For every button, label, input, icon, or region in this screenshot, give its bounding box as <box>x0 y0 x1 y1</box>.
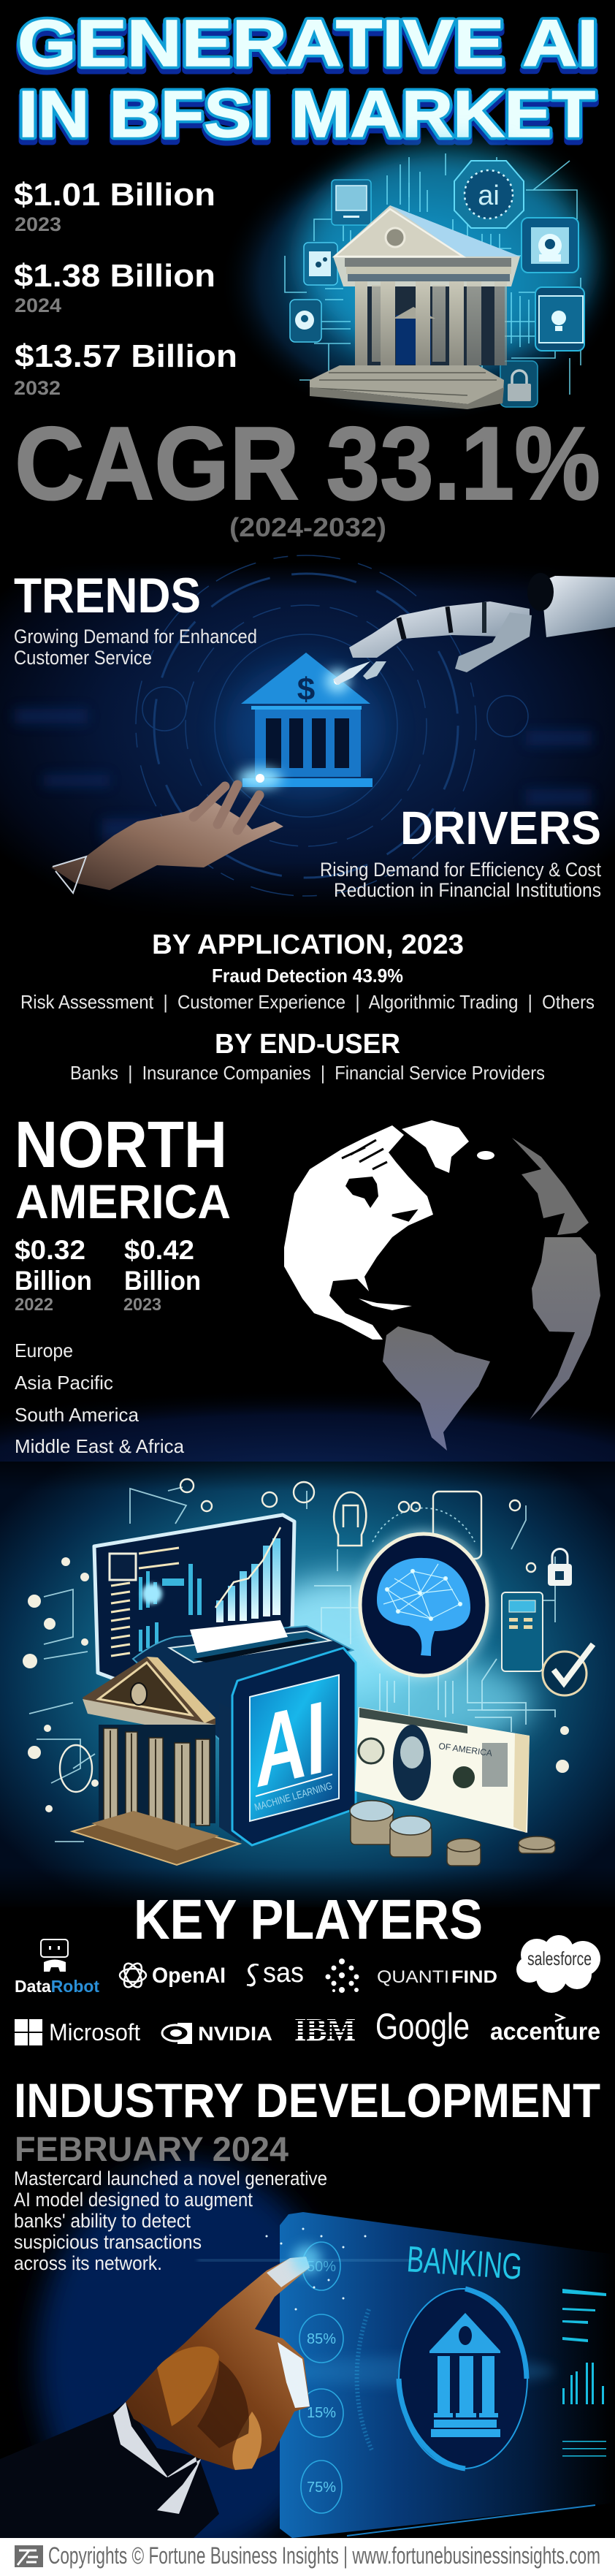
icon: human hand <box>51 785 283 893</box>
icon: lock <box>548 1549 572 1586</box>
dollar bill stack <box>355 1707 530 1833</box>
trends block: TRENDS <box>14 568 201 623</box>
percentage rings <box>299 2242 373 2513</box>
logo: DataRobot: DataRobot <box>15 1977 99 1996</box>
icon: lightbulb panel <box>535 287 584 351</box>
CAGR figure: (2024-2032) <box>229 512 386 542</box>
logo: Accenture: accenture <box>490 2018 600 2045</box>
icon: gear panel <box>290 300 321 342</box>
title: IN BFSI MARKET <box>18 83 595 156</box>
holographic panel <box>278 2212 615 2538</box>
market size figures: $1.38 Billion <box>14 258 215 294</box>
logo: NVIDIA: NVIDIA <box>198 2023 272 2045</box>
industry development text: FEBRUARY 2024 <box>15 2129 289 2168</box>
suit sleeve <box>0 2402 219 2538</box>
title: IN BFSI MARKET <box>18 78 595 151</box>
logo: Salesforce: salesforce <box>527 1948 592 1969</box>
market size figures: 2024 <box>15 295 61 316</box>
segmentation by application <box>20 930 595 1013</box>
other regions list: Europe <box>15 1340 73 1361</box>
miniature bank <box>72 1657 240 1865</box>
footer <box>0 2538 615 2576</box>
north america heading and values: $0.42 <box>124 1235 194 1265</box>
logo: IBM: IBM <box>294 2012 356 2048</box>
drivers block <box>320 802 601 901</box>
illustration: banking touch screen <box>0 2163 615 2558</box>
industry development text: suspicious transactions <box>14 2231 202 2253</box>
icon: glowing bank <box>226 653 386 800</box>
illustration: bank with AI icons <box>219 139 615 424</box>
panel: trends and drivers background <box>0 555 615 921</box>
logo: Quantifind: FIND <box>451 1967 497 1987</box>
light flare <box>197 2227 416 2311</box>
icon: panel left upper <box>304 243 337 285</box>
title <box>18 7 598 156</box>
pointing hand <box>126 2257 310 2470</box>
other regions list: Asia Pacific <box>15 1372 113 1394</box>
segmentation by end-user: BY END-USER <box>215 1029 400 1060</box>
north america heading and values: $0.32 <box>15 1235 85 1265</box>
logo: SAS <box>247 1958 304 1988</box>
icon: robot hand <box>333 573 615 685</box>
data bars <box>562 2289 606 2457</box>
logo: OpenAI <box>120 1961 226 1990</box>
icon: check mark <box>543 1644 593 1695</box>
icon: panel right upper <box>522 218 578 273</box>
logo: Google: Google <box>375 2006 470 2047</box>
title: GENERATIVE AI <box>18 12 598 85</box>
segmentation by application: Fraud Detection 43.9% <box>212 965 403 987</box>
title: IN BFSI MARKET <box>18 78 595 151</box>
monitor with chart <box>94 1515 294 1680</box>
drivers block: DRIVERS <box>400 802 601 854</box>
north america heading and values: 2023 <box>123 1295 161 1315</box>
market size figures <box>14 177 237 399</box>
icon: bank in ring <box>399 2289 527 2469</box>
logo: Quantifind: QUANTI <box>377 1967 449 1987</box>
logo: Fortune Business Insights <box>15 2545 43 2567</box>
logo: OpenAI: OpenAI <box>152 1964 226 1988</box>
logo: SAS: sas <box>263 1958 304 1988</box>
africa landmass <box>530 1237 600 1420</box>
title: GENERATIVE AI <box>18 7 598 80</box>
other regions list: Middle East & Africa <box>15 1435 185 1457</box>
icon: calculator <box>502 1592 543 1671</box>
circuit lines <box>29 1487 555 1842</box>
bank building <box>310 205 520 409</box>
AI box <box>133 1620 356 1845</box>
icon: glowing bank: $ <box>297 672 315 707</box>
illustration: AI banking scene <box>0 1462 615 1911</box>
industry development text <box>14 2073 600 2274</box>
brain circle <box>356 1530 491 1679</box>
shirt cuff <box>113 2402 201 2514</box>
illustration: globe <box>284 1120 600 1451</box>
north america heading and values: Billion <box>15 1266 92 1296</box>
illustration: banking touch screen: 15% <box>307 2405 336 2421</box>
segmentation by application: BY APPLICATION, 2023 <box>152 930 464 960</box>
other regions list <box>15 1340 185 1457</box>
glow under region section <box>0 1367 615 1476</box>
logo: NVIDIA <box>162 2023 272 2045</box>
logo: Quantifind <box>326 1958 497 1993</box>
AI box: MACHINE LEARNING <box>253 1779 334 1813</box>
illustration: banking touch screen: 75% <box>307 2480 336 2496</box>
dollar bill stack: OF AMERICA <box>438 1741 493 1758</box>
illustration: banking touch screen: 50% <box>307 2259 336 2275</box>
AI box: AI <box>256 1679 326 1810</box>
industry development text: AI model designed to augment <box>14 2189 253 2211</box>
icon: lightbulb <box>334 1492 366 1546</box>
illustration: banking touch screen: 85% <box>307 2331 336 2347</box>
north america landmass <box>284 1120 494 1340</box>
north america heading and values: NORTH <box>15 1109 227 1182</box>
north america heading and values <box>15 1109 231 1315</box>
icon: AI octagon: ai <box>478 181 500 211</box>
trends block: Growing Demand for Enhanced <box>14 626 257 647</box>
icon: lock panel <box>500 361 538 407</box>
icon: AI octagon <box>454 161 524 228</box>
industry development text: Mastercard launched a novel generative <box>14 2167 327 2189</box>
market size figures: 2023 <box>15 213 61 235</box>
title: GENERATIVE AI <box>18 7 598 80</box>
key players heading: KEY PLAYERS <box>134 1888 483 1951</box>
logo: DataRobot <box>15 1939 99 1996</box>
north america heading and values: AMERICA <box>15 1174 231 1228</box>
logo: Microsoft: Microsoft <box>49 2019 140 2045</box>
market size figures: $13.57 Billion <box>15 338 237 374</box>
market size figures: 2032 <box>14 377 61 399</box>
market size figures: $1.01 Billion <box>14 177 215 213</box>
small icons <box>60 1479 535 1792</box>
industry development text: across its network. <box>14 2252 162 2274</box>
south america landmass <box>383 1326 490 1451</box>
north america heading and values: Billion <box>124 1266 201 1296</box>
trends block <box>14 568 257 669</box>
north america heading and values: 2022 <box>15 1295 53 1315</box>
segmentation by end-user <box>70 1029 545 1084</box>
segmentation by end-user: Banks | Insurance Companies | Financial Service Providers <box>70 1062 545 1084</box>
europe landmass <box>512 1138 589 1235</box>
coins <box>350 1801 555 1866</box>
trends block: Customer Service <box>14 647 152 669</box>
industry development text: banks' ability to detect <box>14 2210 191 2232</box>
banking label: BANKING <box>405 2238 524 2287</box>
other regions list: South America <box>15 1404 140 1426</box>
logo: Salesforce <box>516 1935 600 1993</box>
icon: monitor <box>332 180 371 225</box>
